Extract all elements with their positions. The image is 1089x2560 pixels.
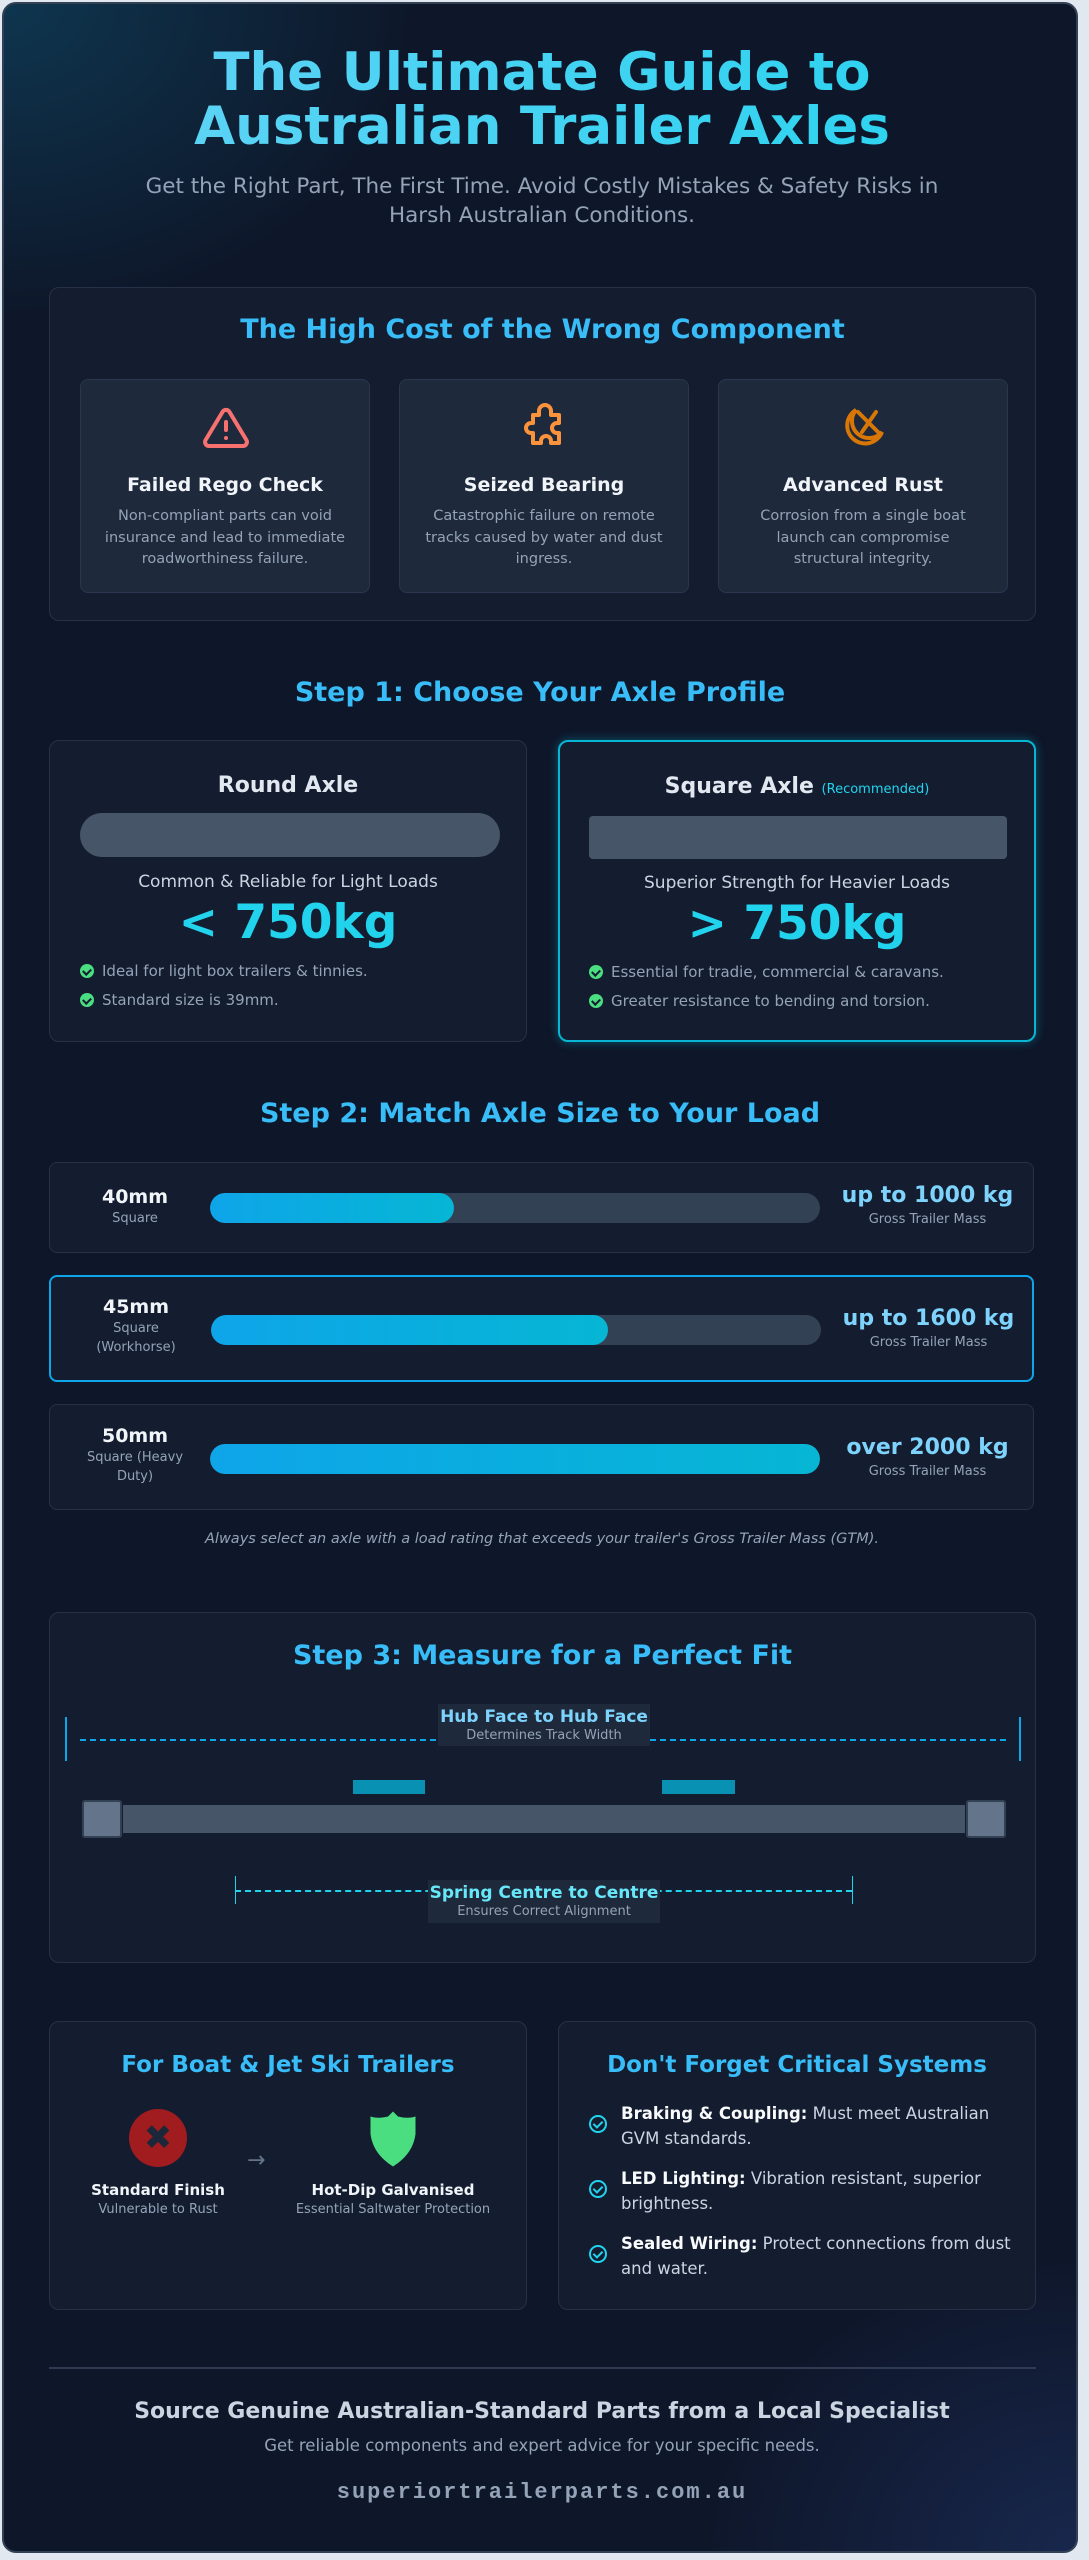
value: < 750kg: [179, 895, 397, 950]
panel: square axle: Superior Strength for Heavier Loads: [644, 873, 950, 893]
panel: round axle: Common & Reliable for Light Loads: [138, 872, 438, 892]
label: standard finish: Vulnerable to Rust: [98, 2202, 218, 2217]
heading: step 2: Step 2: Match Axle Size to Your Load: [260, 1098, 820, 1129]
panel: square axle: [558, 740, 1036, 1042]
spring dimension line: [235, 1876, 236, 1904]
row: 40mm: up to 1000 kg: [842, 1183, 1013, 1208]
panel: critical systems: [558, 2021, 1036, 2310]
hub dimension line: [65, 1717, 67, 1761]
row: 50mm: Square (Heavy: [87, 1450, 183, 1465]
panel: critical systems: LED Lighting: Vibration resistant, superior brightness.: [621, 2169, 981, 2213]
icon: x circle: [129, 2109, 187, 2167]
note: Always select an axle with a load rating that exceeds your trailer's Gross Trailer Mass (GTM).: [205, 1531, 879, 1547]
row: 50mm: 50mm: [102, 1425, 168, 1447]
url: superiortrailerparts.com.au: [337, 2480, 747, 2505]
hub label: [438, 1704, 650, 1746]
row: 40mm: Square: [112, 1211, 158, 1226]
row: 45mm: Gross Trailer Mass: [870, 1335, 987, 1350]
divider: [49, 2367, 1036, 2369]
row: 45mm: Square: [113, 1321, 159, 1336]
row: 45mm: (Workhorse): [96, 1340, 176, 1355]
row: 40mm: Gross Trailer Mass: [869, 1212, 986, 1227]
hub label: Determines Track Width: [466, 1728, 622, 1743]
panel: round axle: Round Axle: [218, 773, 358, 798]
card: failed rego: Non-compliant parts can void insurance and lead to immediate roadworthiness failure.: [105, 508, 345, 567]
card: seized bearing: Seized Bearing: [464, 474, 624, 496]
icon: shield: [370, 2112, 416, 2166]
arrow: →: [247, 2148, 265, 2173]
panel: boat trailers: For Boat & Jet Ski Trailers: [121, 2052, 455, 2078]
hub label: Hub Face to Hub Face: [440, 1707, 648, 1727]
panel: square axle: Greater resistance to bending and torsion.: [611, 992, 930, 1010]
row: 45mm: 45mm: [103, 1296, 169, 1318]
label: standard finish: Standard Finish: [91, 2181, 225, 2199]
row: 50mm: Gross Trailer Mass: [869, 1464, 986, 1479]
card: rust: Advanced Rust: [783, 474, 943, 496]
panel: critical systems: Don't Forget Critical Systems: [607, 2052, 987, 2078]
panel: step 3: Step 3: Measure for a Perfect Fit: [293, 1640, 792, 1671]
heading: The High Cost of the Wrong Component: [240, 314, 845, 345]
label: galvanised: Essential Saltwater Protection: [296, 2202, 490, 2217]
row: 40mm: 40mm: [102, 1186, 168, 1208]
square bar: [589, 816, 1007, 859]
row: 50mm: over 2000 kg: [846, 1435, 1009, 1460]
title: The Ultimate Guide to: [213, 42, 871, 103]
row: 50mm: Duty): [117, 1469, 153, 1484]
panel: boat trailers: [49, 2021, 527, 2310]
panel: high cost: [49, 287, 1036, 621]
axle beam: [123, 1805, 965, 1833]
value: > 750kg: [688, 896, 906, 951]
panel: round axle: [49, 740, 527, 1042]
icon: rust: [845, 408, 884, 446]
label: standard finish: [91, 2181, 225, 2217]
panel: round axle: Ideal for light box trailers & tinnies.: [102, 962, 368, 980]
panel: round axle: Standard size is 39mm.: [102, 991, 279, 1009]
card: failed rego: [80, 379, 370, 593]
row: 45mm: up to 1600 kg: [843, 1306, 1014, 1331]
panel: square axle: Essential for tradie, commercial & caravans.: [611, 963, 944, 981]
footer text: Get reliable components and expert advice for your specific needs.: [264, 2436, 820, 2455]
icon: x circle: ✖: [144, 2118, 172, 2158]
icon: warning: [203, 408, 249, 448]
card: seized bearing: Catastrophic failure on remote tracks caused by water and dust ingress.: [425, 508, 663, 567]
spring pads: [353, 1780, 425, 1794]
panel: step 3: [49, 1612, 1036, 1963]
card: rust: [718, 379, 1008, 593]
label: galvanised: [296, 2181, 490, 2217]
spring label: Ensures Correct Alignment: [457, 1904, 631, 1919]
panel: critical systems: Braking & Coupling: Must meet Australian GVM standards.: [621, 2104, 989, 2148]
row: 40mm: [49, 1162, 1034, 1253]
card: seized bearing: [399, 379, 689, 593]
panel: critical systems: Sealed Wiring: Protect connections from dust and water.: [621, 2234, 1011, 2278]
icon: puzzle: [524, 403, 561, 445]
subtitle: Get the Right Part, The First Time. Avoid Costly Mistakes & Safety Risks in Harsh Australian Conditions.: [146, 174, 938, 228]
title: Australian Trailer Axles: [194, 96, 890, 157]
round bar: [80, 813, 500, 857]
spring label: [428, 1880, 660, 1923]
footer heading: Source Genuine Australian-Standard Parts from a Local Specialist: [134, 2399, 950, 2424]
row: 50mm: [49, 1404, 1034, 1510]
diagram: axle measurement: [65, 1704, 1021, 1923]
row: 45mm: [49, 1275, 1034, 1382]
spring label: Spring Centre to Centre: [430, 1883, 658, 1903]
heading: step 1: Step 1: Choose Your Axle Profile: [295, 677, 785, 708]
card: failed rego: Failed Rego Check: [127, 474, 323, 496]
title: [4, 46, 1080, 154]
panel: square axle: Square Axle (Recommended): [665, 774, 929, 799]
card: rust: Corrosion from a single boat launch can compromise structural integrity.: [760, 508, 966, 567]
label: galvanised: Hot-Dip Galvanised: [312, 2181, 474, 2199]
